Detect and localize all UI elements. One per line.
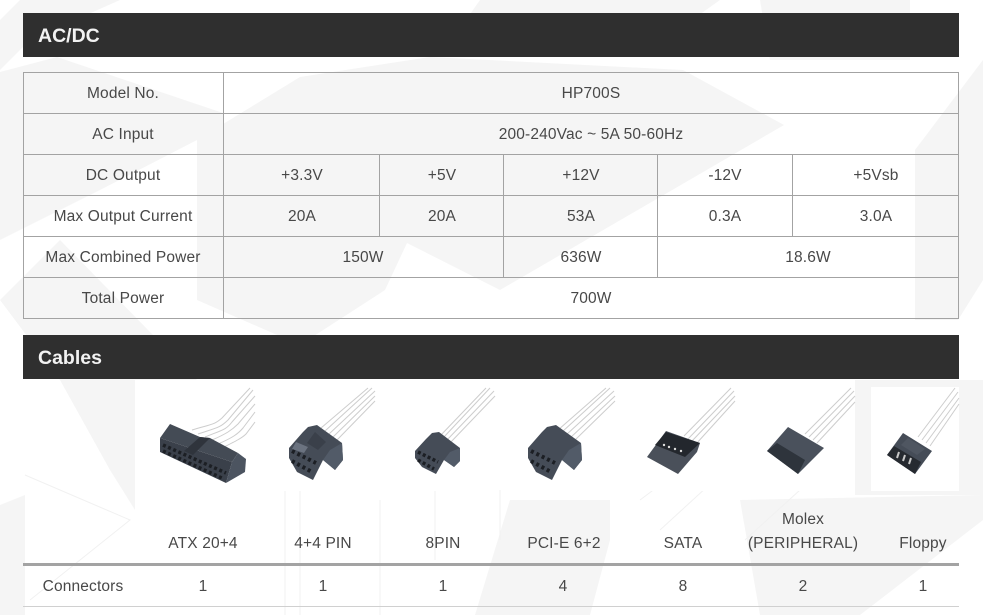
spec table: AC/DC: -12V xyxy=(708,167,742,184)
heading: Cables: Cables xyxy=(38,347,102,369)
cables table: PCI-E 6+2 xyxy=(527,535,601,552)
spec table: AC/DC: +5Vsb xyxy=(853,167,899,184)
cables table: ATX 20+4 xyxy=(168,535,238,552)
cables table: 1 xyxy=(199,578,207,595)
heading: AC/DC: AC/DC xyxy=(38,25,100,47)
cables table: SATA xyxy=(664,535,702,552)
spec table: AC/DC: 18.6W xyxy=(785,249,831,266)
cables table: 1 xyxy=(919,578,927,595)
spec table: AC/DC: AC Input xyxy=(92,126,154,143)
icon: PCI-E 6+2 connector xyxy=(528,425,582,480)
spec table: AC/DC: 636W xyxy=(560,249,602,266)
spec table: AC/DC: +5V xyxy=(428,167,456,184)
spec table: AC/DC: Max Combined Power xyxy=(45,249,201,266)
spec table: AC/DC: 200-240Vac ~ 5A 50-60Hz xyxy=(499,126,683,143)
spec table: AC/DC: DC Output xyxy=(86,167,160,184)
cables table: 1 xyxy=(439,578,447,595)
spec table: AC/DC: Total Power xyxy=(82,290,164,307)
icon: SATA connector xyxy=(647,431,700,474)
spec table: AC/DC xyxy=(23,72,959,319)
cables table: Molex xyxy=(782,511,824,528)
spec table: AC/DC: Max Output Current xyxy=(54,208,192,225)
cables table: 2 xyxy=(799,578,807,595)
icon: Floppy connector xyxy=(887,433,932,474)
spec table: AC/DC: HP700S xyxy=(562,85,620,102)
spec table: AC/DC: 3.0A xyxy=(860,208,892,225)
cables table: Floppy xyxy=(899,535,947,552)
cables table xyxy=(23,511,959,607)
cables table: 4 xyxy=(559,578,567,595)
cables table: Connectors xyxy=(43,578,123,595)
cables table: 1 xyxy=(319,578,327,595)
cables table: 4+4 PIN xyxy=(294,535,352,552)
icon: Molex connector xyxy=(767,427,824,474)
icon: ATX 20+4 connector xyxy=(160,424,246,483)
icon: 4+4 PIN connector xyxy=(289,425,343,480)
spec table: AC/DC: 20A xyxy=(288,208,316,225)
cables table: (PERIPHERAL) xyxy=(748,535,858,552)
icon: 8PIN connector xyxy=(415,432,460,474)
spec table: AC/DC: 700W xyxy=(570,290,612,307)
spec table: AC/DC: 150W xyxy=(342,249,384,266)
spec table: AC/DC: 20A xyxy=(428,208,456,225)
spec table: AC/DC: +12V xyxy=(562,167,600,184)
cables table: 8 xyxy=(679,578,687,595)
spec table: AC/DC: +3.3V xyxy=(281,167,323,184)
spec table: AC/DC: Model No. xyxy=(87,85,159,102)
heading: AC/DC xyxy=(23,13,959,57)
cables table: 8PIN xyxy=(425,535,461,552)
heading: Cables xyxy=(23,335,959,379)
spec table: AC/DC: 53A xyxy=(567,208,595,225)
spec table: AC/DC: 0.3A xyxy=(709,208,741,225)
